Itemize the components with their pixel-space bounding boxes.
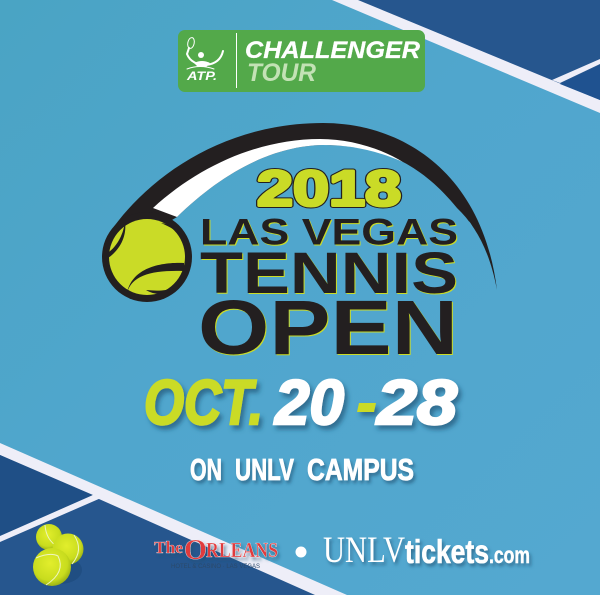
heading: Open: OPEN <box>199 286 459 372</box>
location text: UNLV <box>235 452 294 487</box>
heading: Las Vegas: LAS VEGAS <box>201 212 459 254</box>
heading: Tennis: TENNIS <box>201 242 459 307</box>
divider <box>236 33 237 88</box>
sponsor: The Orleans <box>154 535 278 566</box>
heading: 2018: 2018 <box>257 160 401 216</box>
icon: tennis ball <box>102 212 192 302</box>
date: Oct. 20-28: 28 <box>376 368 457 438</box>
date: Oct. 20-28: OCT. <box>144 368 263 438</box>
sponsor: UNLVtickets.com: tickets <box>405 533 489 570</box>
date: Oct. 20-28: 20 <box>274 368 344 438</box>
logo: ATP Challenger Tour badge <box>178 30 425 92</box>
court corner: top right <box>332 0 600 113</box>
location text: CAMPUS <box>307 452 414 487</box>
icon: ATP player with racket <box>187 37 223 69</box>
location text <box>190 452 414 487</box>
court corner: bottom left <box>0 443 347 595</box>
sponsor: The Orleans: O <box>184 535 207 566</box>
sponsor: The Orleans: RLEANS <box>206 538 278 562</box>
separator dot <box>296 546 306 558</box>
swoosh: small notch <box>469 221 481 246</box>
sponsor tagline: HOTEL & CASINO · LAS VEGAS <box>171 564 260 570</box>
heading: Open: OPEN <box>198 285 458 371</box>
swoosh: black arc <box>110 123 497 290</box>
date: Oct. 20-28 <box>144 368 457 438</box>
sponsor: The Orleans: The <box>154 538 183 557</box>
text: ATP: ATP. <box>186 69 217 83</box>
icon: tennis balls <box>33 524 84 586</box>
heading: Las Vegas: LAS VEGAS <box>200 210 458 252</box>
heading: 2018: 2018 <box>257 160 401 216</box>
swoosh: white band <box>153 139 403 217</box>
location text: ON <box>190 452 222 487</box>
sponsor: UNLVtickets.com: .com <box>489 542 530 568</box>
sponsor: UNLVtickets.com <box>323 530 530 571</box>
heading: Tennis: TENNIS <box>200 241 458 306</box>
text: TOUR: TOUR <box>247 59 316 87</box>
sponsor: UNLVtickets.com: UNLV <box>323 530 405 571</box>
event logo: swoosh and tennis ball <box>102 123 497 302</box>
text: CHALLENGER: CHALLENGER <box>245 37 421 64</box>
